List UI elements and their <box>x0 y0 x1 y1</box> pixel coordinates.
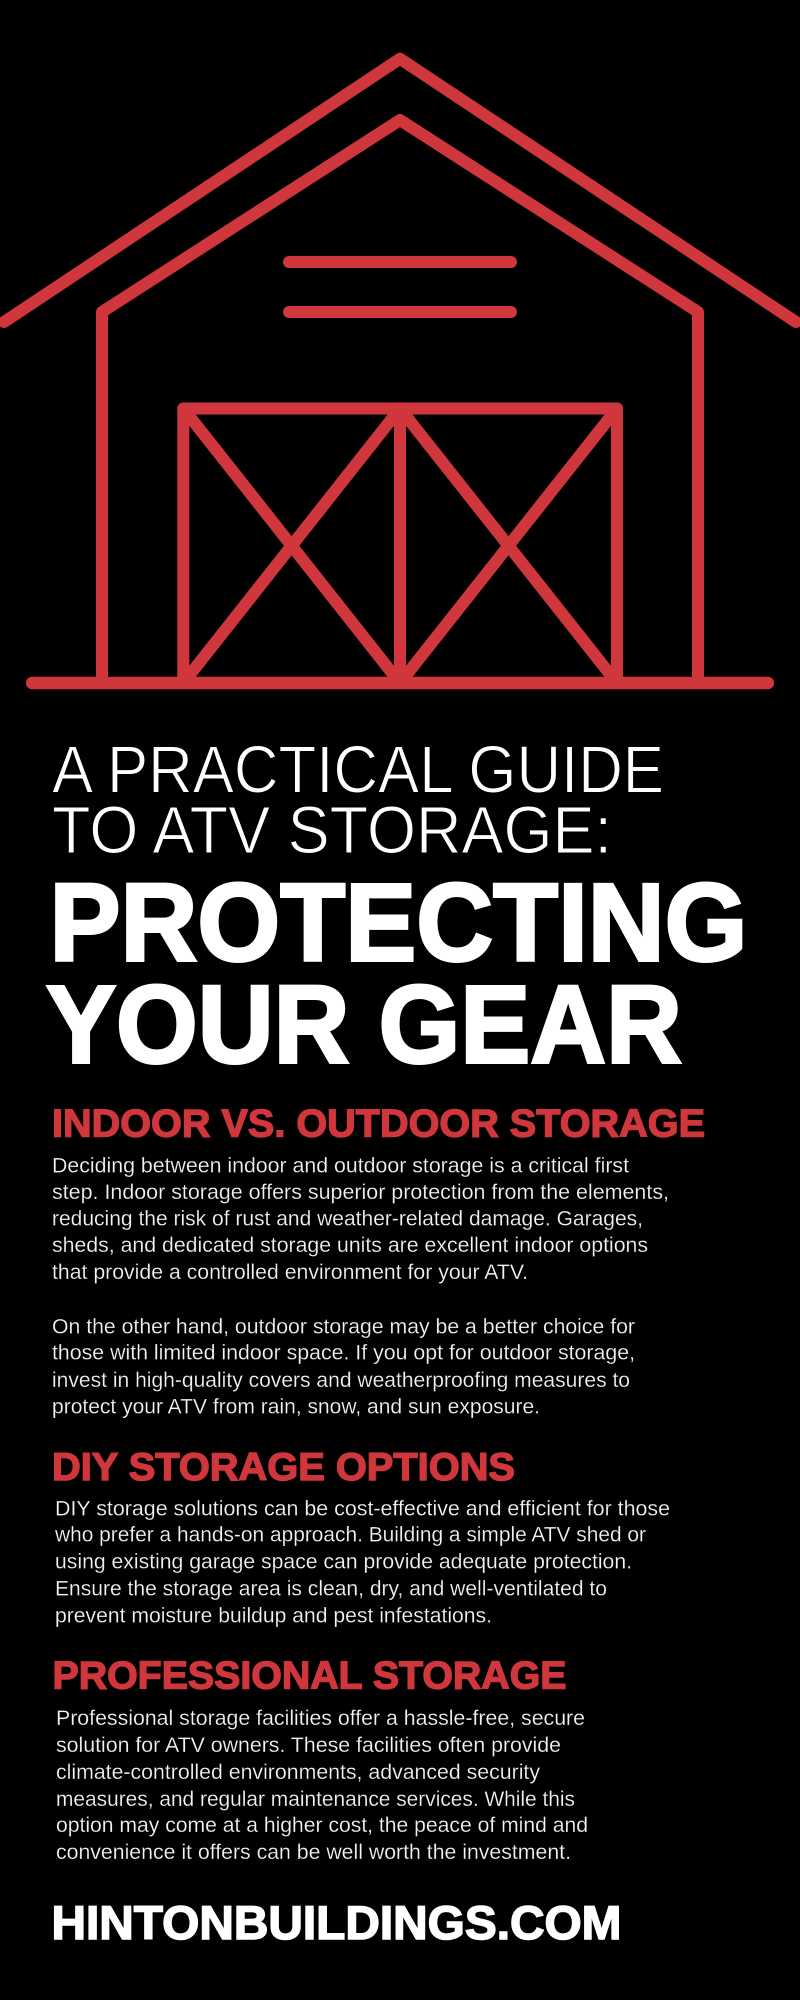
outer roof line <box>4 59 796 322</box>
text block: DIY storage paragraph: who prefer a hands-on approach. Building a simple ATV shed or <box>54 1524 646 1547</box>
text block: indoor storage paragraph: that provide a controlled environment for your ATV. <box>52 1261 528 1284</box>
text block: professional storage paragraph <box>56 1707 588 1864</box>
title line four: YOUR GEAR <box>46 964 682 1086</box>
vent slats <box>289 262 511 312</box>
title line three: PROTECTING <box>50 862 748 984</box>
heading: indoor vs outdoor: INDOOR VS. OUTDOOR STORAGE <box>52 1103 705 1146</box>
text block: professional storage paragraph: convenience it offers can be well worth the investment. <box>56 1841 571 1864</box>
title <box>46 733 748 1086</box>
text block: professional storage paragraph: climate-controlled environments, advanced security <box>56 1761 540 1784</box>
text block: DIY storage paragraph <box>54 1498 670 1627</box>
footer website: HINTONBUILDINGS.COM <box>52 1897 622 1950</box>
text block: outdoor storage paragraph: On the other hand, outdoor storage may be a better choice for <box>52 1316 635 1338</box>
text block: professional storage paragraph: option may come at a higher cost, the peace of mind and <box>56 1814 588 1837</box>
text block: DIY storage paragraph: DIY storage solutions can be cost-effective and efficient for those <box>55 1498 670 1520</box>
heading: DIY storage options: DIY STORAGE OPTIONS <box>52 1446 515 1489</box>
text block: DIY storage paragraph: prevent moisture buildup and pest infestations. <box>55 1604 492 1627</box>
text block: outdoor storage paragraph: those with limited indoor space. If you opt for outdoor storage, <box>52 1342 635 1365</box>
text block: indoor storage paragraph <box>52 1154 669 1284</box>
text block: indoor storage paragraph: sheds, and dedicated storage units are excellent indoor options <box>52 1234 648 1257</box>
text block: indoor storage paragraph: step. Indoor storage offers superior protection from the elements, <box>52 1181 669 1204</box>
text block: indoor storage paragraph: reducing the risk of rust and weather-related damage. Garages, <box>52 1207 643 1230</box>
ground line <box>32 677 768 689</box>
text block: DIY storage paragraph: using existing garage space can provide adequate protection. <box>55 1551 632 1574</box>
text block: outdoor storage paragraph: protect your ATV from rain, snow, and sun exposure. <box>52 1396 540 1418</box>
text block: DIY storage paragraph: Ensure the storage area is clean, dry, and well-ventilated to <box>55 1578 607 1600</box>
barn doors <box>183 408 617 683</box>
text block: professional storage paragraph: measures, and regular maintenance services. While this <box>56 1788 575 1811</box>
text block: outdoor storage paragraph <box>52 1316 635 1418</box>
heading: professional storage: PROFESSIONAL STORAGE <box>52 1655 566 1698</box>
barn walls and inner roof <box>102 120 698 683</box>
title line two: TO ATV STORAGE: <box>52 793 612 868</box>
text block: professional storage paragraph: solution for ATV owners. These facilities often provide <box>56 1734 561 1757</box>
text block: indoor storage paragraph: Deciding between indoor and outdoor storage is a critical first <box>52 1154 629 1178</box>
text block: outdoor storage paragraph: invest in high-quality covers and weatherproofing measures to <box>52 1369 630 1392</box>
title line one: A PRACTICAL GUIDE <box>52 733 664 808</box>
icon: red barn outline <box>4 59 796 683</box>
text block: professional storage paragraph: Professional storage facilities offer a hassle-free, secure <box>56 1707 585 1730</box>
